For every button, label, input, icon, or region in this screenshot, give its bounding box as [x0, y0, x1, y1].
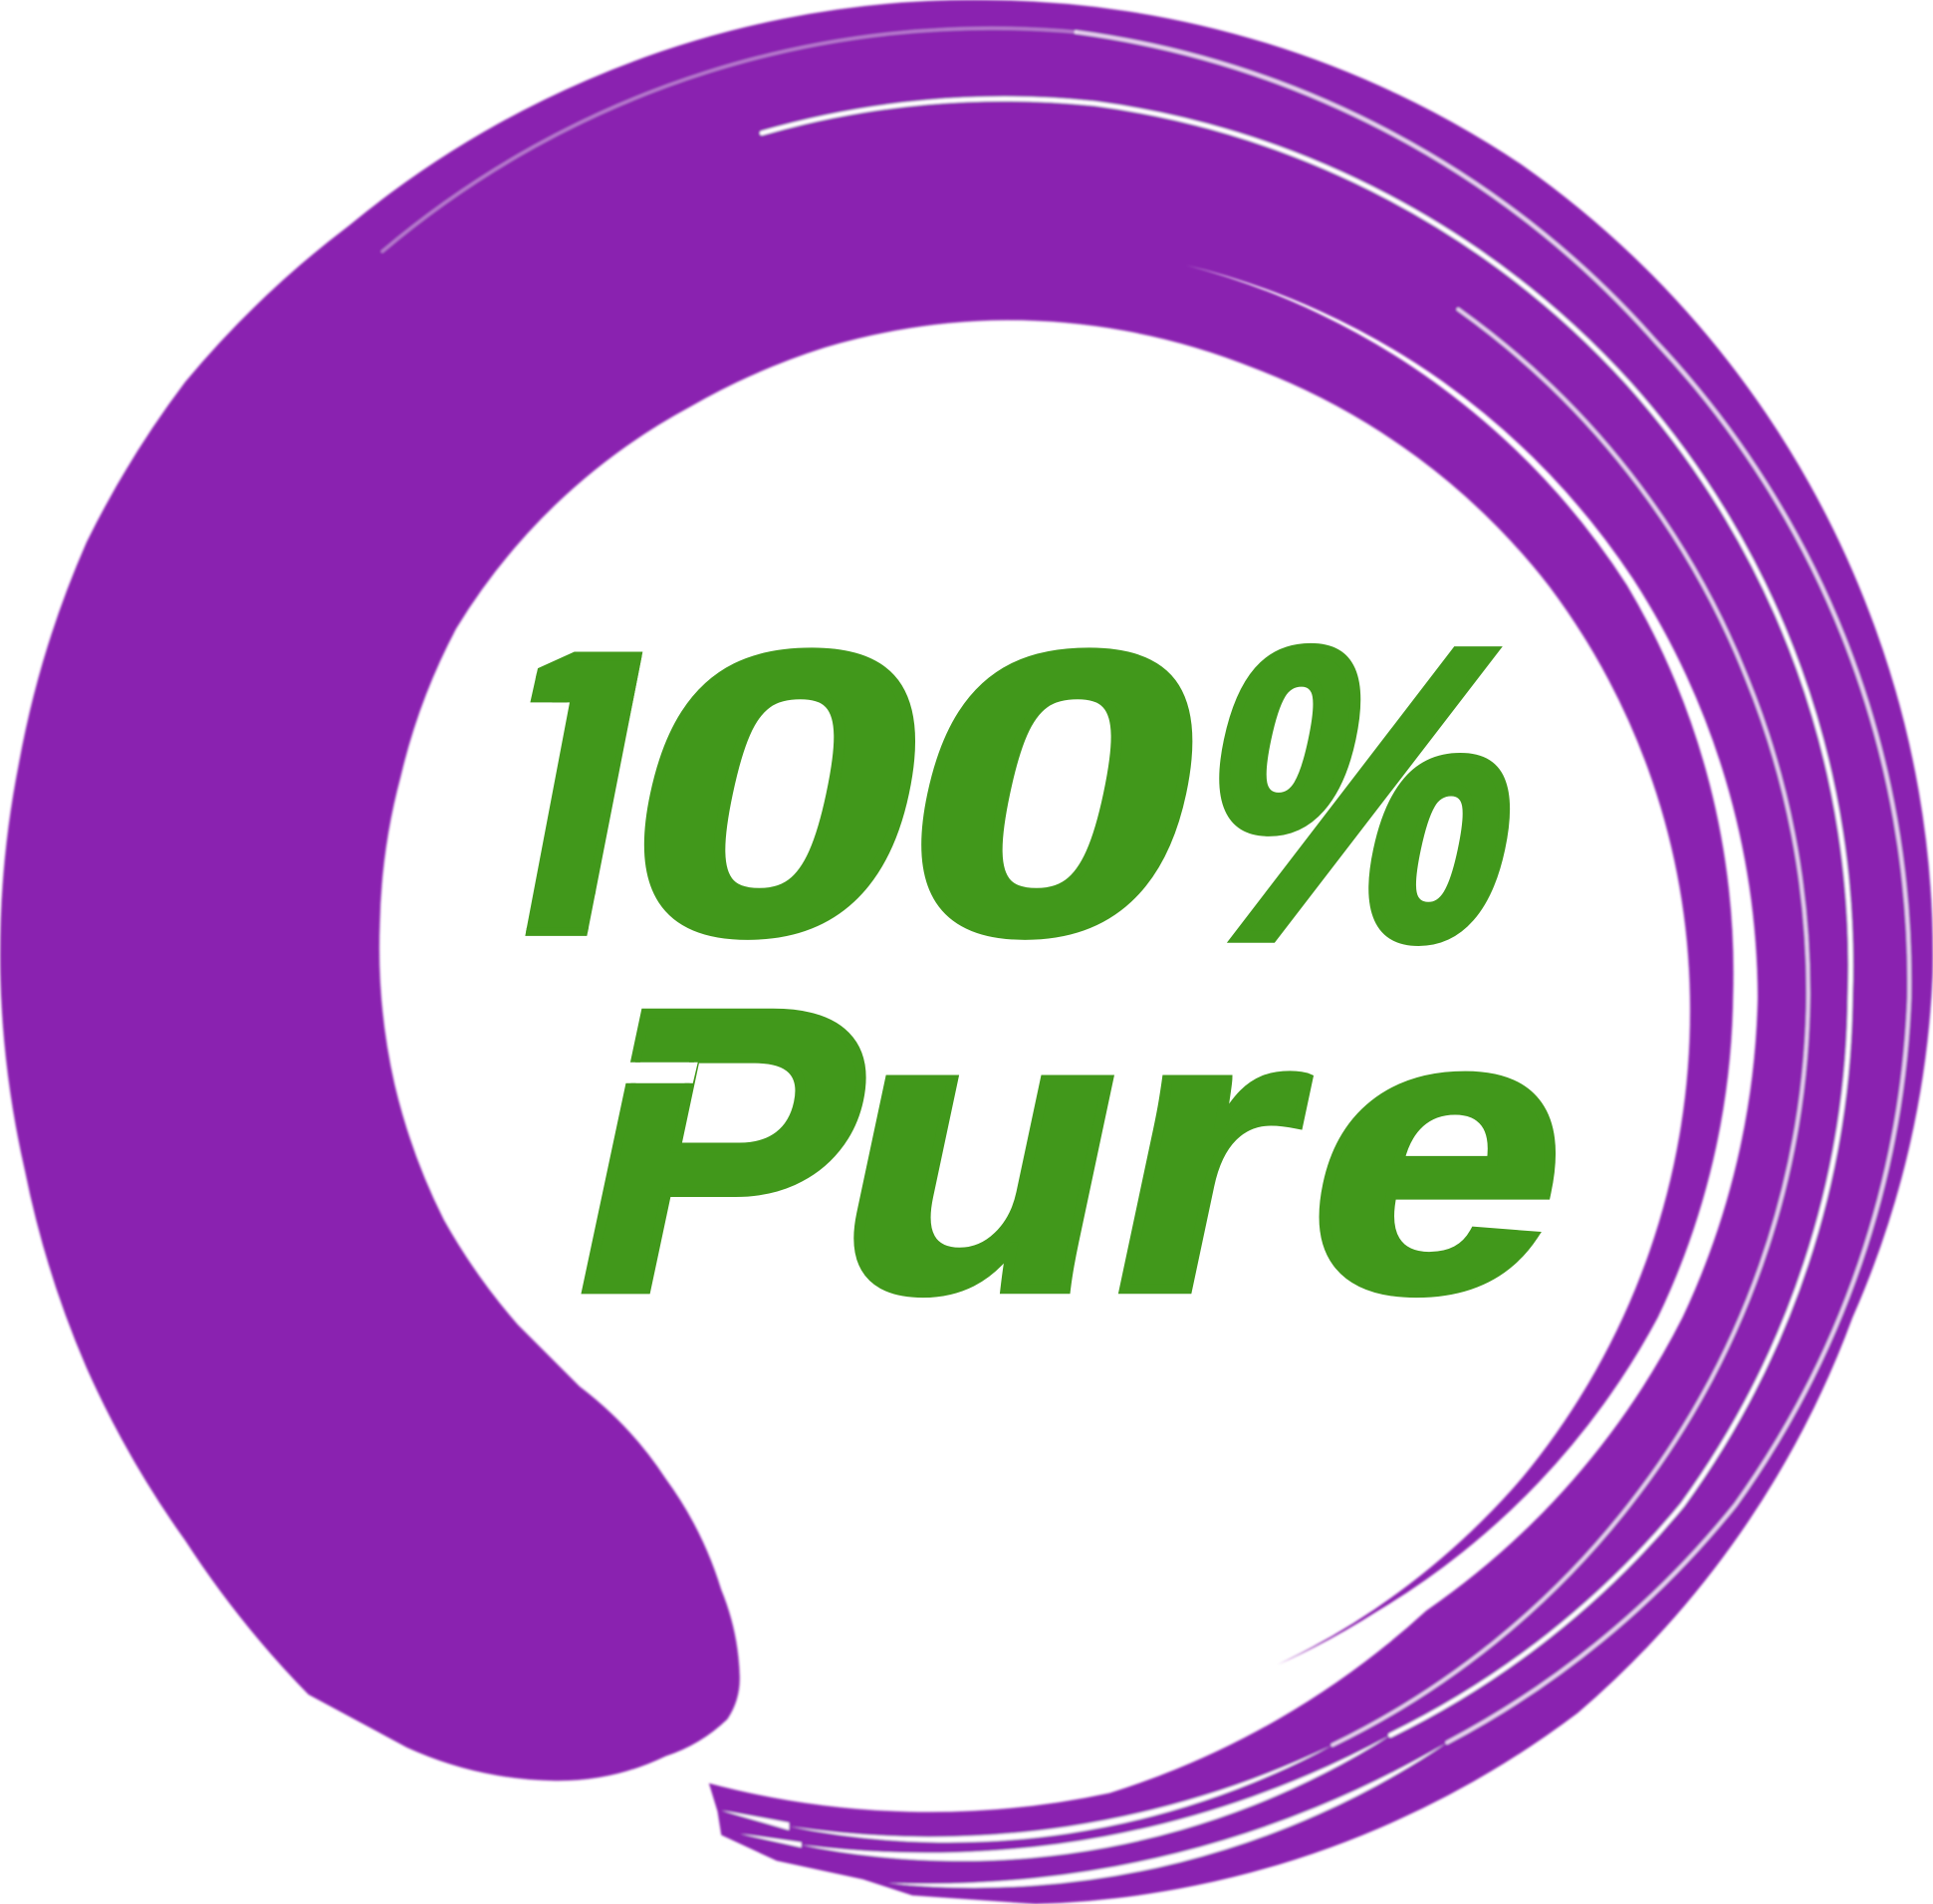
brush crack: outer white line [1077, 32, 1909, 1743]
text: 100% [525, 643, 1510, 946]
text: Pure: u [800, 930, 1171, 1373]
text: 100%: % [1160, 563, 1571, 1025]
brush crack: faint upper-left line [382, 28, 1077, 251]
text: Pure: e [1270, 930, 1617, 1373]
text: Pure: P [542, 927, 909, 1375]
brush crack: inner white line [1332, 310, 1809, 1745]
text: 100%: 0 [865, 569, 1250, 1017]
text: Pure [582, 1008, 1556, 1299]
brush crack: tapered lower white bands [721, 1735, 1447, 1887]
text: Pure: r [1075, 930, 1345, 1373]
text: 100%: 0 [588, 569, 973, 1017]
brush crack: middle white line [762, 99, 1850, 1735]
text: 100%: 1 [373, 569, 758, 1017]
